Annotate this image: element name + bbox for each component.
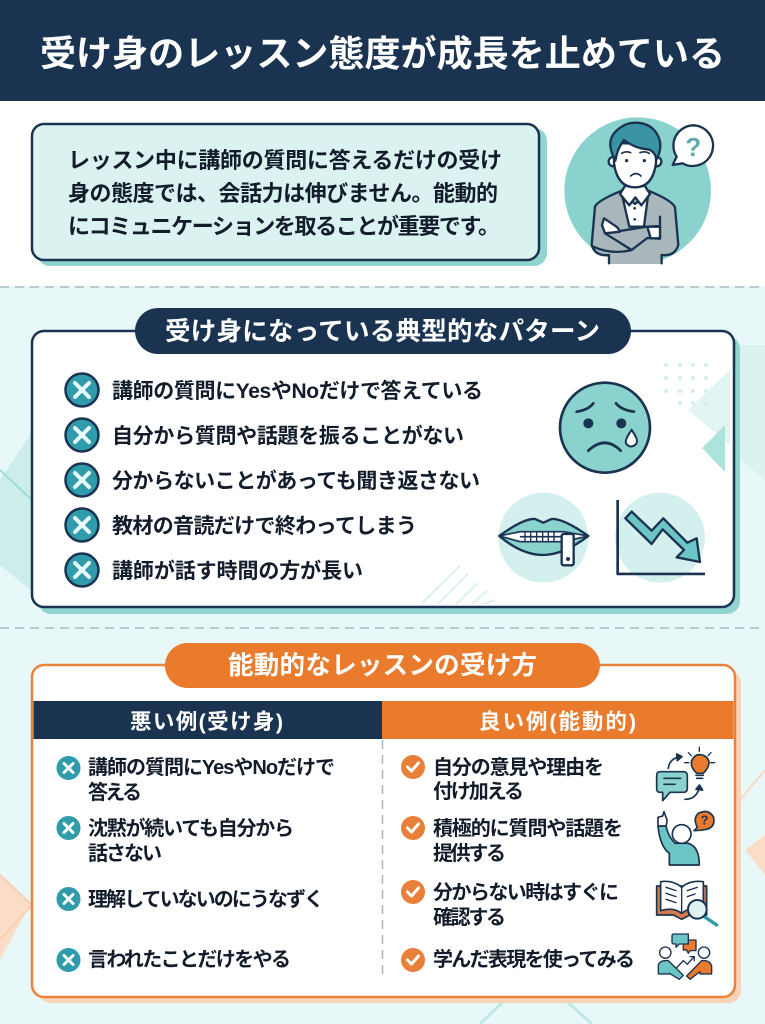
icon: speech bubble and light bulb	[657, 747, 715, 801]
column header: good examples	[382, 701, 734, 739]
list: typical patterns: 講師の質問にYesやNoだけで答えている	[112, 379, 483, 403]
panel: active lesson comparison	[32, 643, 741, 1003]
list: good examples: 学んだ表現を使ってみる	[433, 948, 635, 971]
column header: good examples: 良い例(能動的)	[479, 710, 636, 734]
divider middle	[0, 627, 765, 629]
icon: declining chart	[615, 493, 705, 583]
list: good examples: 付け加える	[433, 780, 524, 803]
divider top	[0, 286, 765, 288]
icon: handshake with growth chart	[658, 934, 712, 979]
list: good examples: 自分の意見や理由を	[433, 756, 604, 779]
intro panel	[32, 124, 547, 266]
icon: zipped lips	[498, 493, 588, 583]
list: typical patterns: 教材の音読だけで終わってしまう	[112, 515, 417, 538]
column header: bad examples	[34, 701, 382, 739]
icon: person raising hand with question	[658, 811, 714, 865]
title banner: 受け身のレッスン態度が成長を止めている	[40, 33, 725, 74]
icon: open book with magnifier	[657, 881, 717, 925]
list: typical patterns	[66, 374, 483, 586]
section heading pill: 受け身になっている典型的なパターン	[165, 318, 600, 346]
panel decoration	[421, 363, 730, 604]
icon: person raising hand with question: ?	[701, 814, 708, 828]
column header: bad examples: 悪い例(受け身)	[130, 710, 283, 734]
list: good examples: 積極的に質問や話題を	[433, 817, 623, 840]
list: bad examples: 言われたことだけをやる	[88, 948, 291, 971]
icon: confused man with arms crossed: ?	[685, 132, 701, 162]
list: good examples	[401, 755, 635, 972]
list: bad examples: 沈黙が続いても自分から	[88, 816, 294, 840]
list: bad examples: 話さない	[88, 842, 162, 865]
list: typical patterns: 講師が話す時間の方が長い	[112, 559, 363, 583]
title banner	[0, 0, 765, 101]
section heading pill	[135, 308, 631, 354]
list: typical patterns: 自分から質問や話題を振ることがない	[112, 424, 464, 448]
list: bad examples: 理解していないのにうなずく	[88, 888, 324, 911]
list: bad examples: 講師の質問にYesやNoだけで	[88, 756, 335, 779]
list: bad examples	[56, 756, 335, 972]
intro panel: レッスン中に講師の質問に答えるだけの受け	[68, 148, 502, 173]
icon: crying face	[560, 383, 650, 473]
list: good examples: 提供する	[433, 842, 506, 865]
list: good examples: 分からない時はすぐに	[433, 881, 619, 904]
icon: confused man with arms crossed	[564, 117, 713, 264]
intro panel: にコミュニケーションを取ることが重要です。	[68, 214, 500, 239]
list: typical patterns: 分からないことがあっても聞き返さない	[112, 469, 480, 493]
list: bad examples: 答える	[88, 780, 142, 804]
section heading pill: 能動的なレッスンの受け方	[228, 652, 537, 680]
list: good examples: 確認する	[433, 906, 506, 929]
intro panel: 身の態度では、会話力は伸びません。能動的	[68, 181, 498, 206]
section heading pill	[165, 643, 600, 688]
panel: passive patterns	[32, 308, 740, 614]
